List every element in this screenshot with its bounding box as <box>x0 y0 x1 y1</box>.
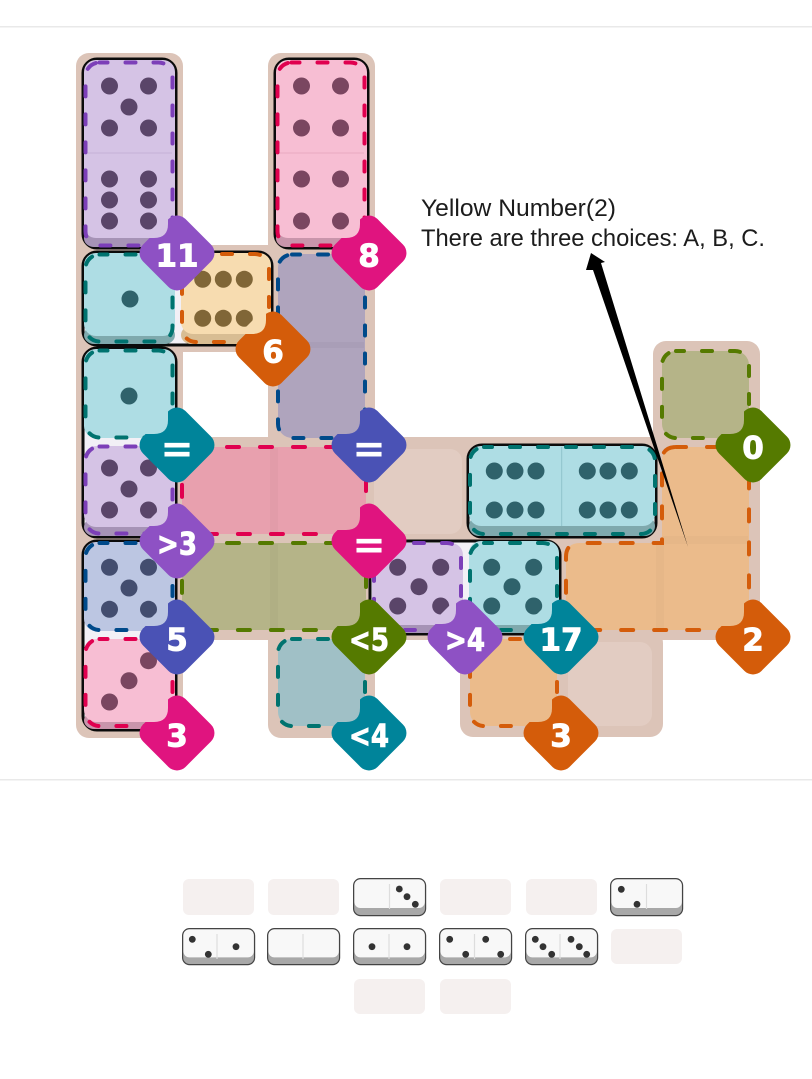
tray row 3 <box>354 979 511 1014</box>
region: blue dashed <box>278 254 365 438</box>
region: olive dashed wide <box>182 543 366 630</box>
domino: purple 5 and teal 5 <box>370 541 560 634</box>
tray domino 0|3 <box>354 879 426 916</box>
constraint diamond: 8: 8 <box>358 238 380 274</box>
constraint diamond: 2: 2 <box>742 622 764 658</box>
annotation text <box>421 195 765 252</box>
domino: blue 5 and pink 3 <box>83 541 176 730</box>
region: orange small <box>470 639 557 726</box>
constraint diamond: 3 orange <box>519 691 603 775</box>
constraint diamond: 3 orange: 3 <box>550 718 572 754</box>
tray domino 2|0 <box>611 879 683 916</box>
constraint diamond: less than 4 <box>327 691 411 775</box>
region: teal dashed <box>278 639 365 726</box>
constraint diamond: equals teal <box>135 403 219 487</box>
region: olive dashed top right <box>662 351 749 438</box>
constraint diamond: 11 <box>135 211 219 295</box>
constraint diamond: 3 pink: 3 <box>166 718 188 754</box>
constraint diamond: equals teal: = <box>160 426 194 472</box>
tray domino 3|3 <box>526 929 598 965</box>
constraint diamond: 5: 5 <box>166 622 188 658</box>
constraint diamond: 0 <box>711 403 795 487</box>
constraint diamond: greater than 3 <box>135 499 219 583</box>
constraint diamond: greater than 3: >3 <box>157 526 197 562</box>
domino: pink 4 and 4 <box>275 59 368 248</box>
annotation text: There are three choices: A, B, C. <box>421 225 765 252</box>
constraint diamond: less than 4: <4 <box>349 718 389 754</box>
constraint diamond: 17: 17 <box>539 622 583 658</box>
empty board cells <box>374 449 652 726</box>
constraint diamond: 0: 0 <box>742 430 764 466</box>
domino: teal 1 and purple 5 <box>83 348 176 537</box>
constraint diamond: equals blue: = <box>352 426 386 472</box>
constraint diamond: greater than 4 <box>423 595 507 679</box>
region: red dashed <box>182 447 366 534</box>
tray domino 1|1 <box>354 929 426 965</box>
constraint diamond: equals blue <box>327 403 411 487</box>
constraint diamond: equals pink <box>327 499 411 583</box>
tray domino 2|2 <box>440 929 512 965</box>
constraint diamond: 2 <box>711 595 795 679</box>
tray row 1 <box>183 879 683 916</box>
constraint diamond: 6: 6 <box>262 334 284 370</box>
constraint diamond: less than 5: <5 <box>349 622 389 658</box>
region: orange L <box>566 447 749 630</box>
puzzle board background <box>76 53 760 738</box>
constraint diamond: 3 pink <box>135 691 219 775</box>
arrow <box>586 253 688 547</box>
constraint diamond: 5 <box>135 595 219 679</box>
constraint diamond: 17 <box>519 595 603 679</box>
constraint diamond: 8 <box>327 211 411 295</box>
tray row 2 <box>183 929 682 965</box>
constraint diamond: greater than 4: >4 <box>445 622 485 658</box>
constraint diamond: 11: 11 <box>155 238 199 274</box>
domino: teal 6 and 6 <box>468 445 656 537</box>
constraint diamond: equals pink: = <box>352 522 386 568</box>
tray domino 2|1 <box>183 929 255 965</box>
tray domino 0|0 <box>268 929 340 965</box>
constraint diamond: less than 5 <box>327 595 411 679</box>
domino: purple 5 and 6 <box>83 59 176 248</box>
domino: teal 1 and orange 6 <box>83 252 272 345</box>
constraint diamond: 6 <box>231 307 315 391</box>
annotation text: Yellow Number(2) <box>421 195 616 222</box>
